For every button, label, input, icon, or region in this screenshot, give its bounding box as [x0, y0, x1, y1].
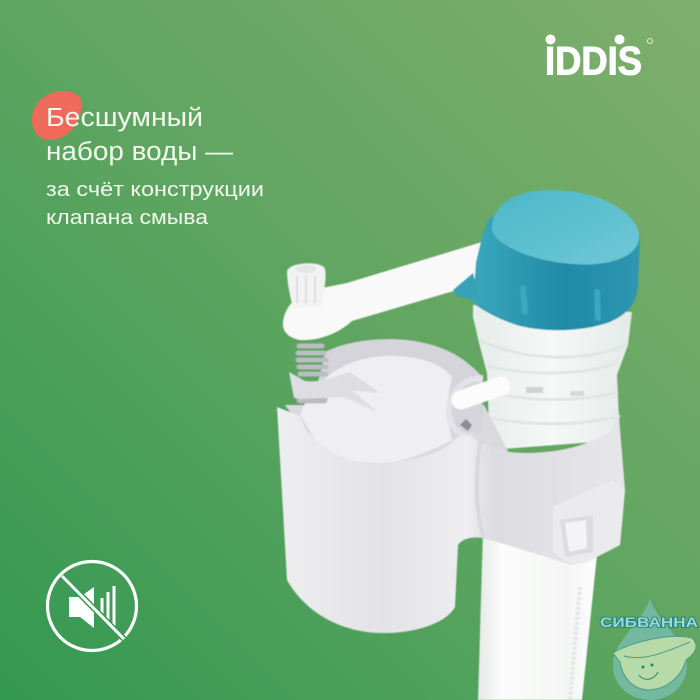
heading: Бесшумный — [46, 104, 203, 132]
watermark text: СИБВАННА — [600, 614, 698, 630]
watermark: СИБВАННА — [600, 598, 698, 700]
subheading: клапана смыва — [46, 206, 209, 229]
watermark drop — [613, 598, 687, 700]
icon: muted sound — [48, 562, 136, 650]
heading: набор воды — — [46, 138, 234, 166]
holder collar — [277, 405, 625, 633]
arm knob — [287, 263, 326, 308]
collar clip — [553, 480, 625, 564]
float chamber — [300, 339, 483, 432]
product: fill valve — [277, 190, 640, 700]
heading — [46, 104, 234, 166]
float arm — [283, 242, 486, 340]
watermark tub — [613, 636, 696, 690]
teal cap — [453, 190, 640, 330]
chamber inner wall — [285, 405, 510, 472]
spring clip — [289, 372, 380, 412]
float disc — [300, 356, 452, 465]
watermark face — [639, 664, 658, 679]
adjustment spring — [298, 346, 326, 400]
cap lid — [492, 190, 639, 265]
cap tab — [453, 273, 480, 302]
locking pin — [461, 386, 501, 400]
valve neck — [473, 305, 632, 450]
subheading: за счёт конструкции — [46, 178, 264, 201]
cap skirt — [473, 200, 640, 330]
subheading — [46, 178, 264, 229]
red accent blob — [32, 91, 82, 140]
sound bars — [102, 586, 114, 627]
speaker — [69, 587, 94, 628]
logo: IDDIS: IDDIS — [545, 40, 642, 84]
slash — [62, 576, 124, 639]
valve tube — [478, 530, 598, 700]
neck cup ring — [449, 378, 483, 438]
cap ribs — [523, 288, 598, 318]
